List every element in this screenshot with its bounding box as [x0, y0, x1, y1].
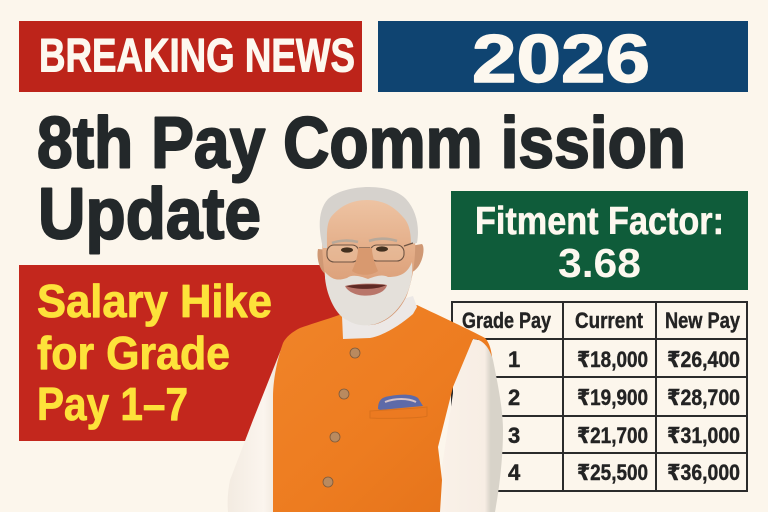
panel: salary hike: Salary Hike	[37, 275, 272, 327]
panel: fitment factor	[451, 191, 748, 290]
panel: fitment factor: Fitment Factor:	[475, 200, 724, 243]
table: grade pay: Current	[575, 308, 644, 333]
table: grade pay: ₹18,000	[577, 347, 648, 372]
table: grade pay: ₹25,500	[577, 460, 648, 485]
table: grade pay: 2	[508, 385, 520, 410]
table: grade pay: ₹19,900	[577, 385, 648, 410]
portrait: man in orange vest	[228, 187, 503, 512]
table: grade pay: ₹28,700	[667, 385, 740, 410]
banner: year 2026	[378, 21, 748, 97]
panel: salary hike: for Grade	[37, 327, 230, 379]
banner: breaking news: BREAKING NEWS	[39, 28, 355, 82]
table: grade pay: 4	[508, 460, 521, 485]
table: grade pay: ₹36,000	[667, 460, 740, 485]
panel: salary hike	[19, 265, 344, 441]
panel: salary hike: Pay 1–7	[37, 378, 188, 430]
panel: fitment factor: 3.68	[558, 240, 641, 286]
table: grade pay: 1	[508, 347, 520, 372]
table: grade pay: 3	[508, 423, 520, 448]
table: grade pay: ₹26,400	[667, 347, 740, 372]
title: 8th Pay Comm ission	[37, 104, 686, 184]
title	[37, 104, 686, 254]
banner: breaking news	[19, 21, 362, 92]
table: grade pay: ₹31,000	[667, 423, 740, 448]
banner: year 2026: 2026	[472, 21, 650, 97]
table: grade pay: ₹21,700	[577, 423, 648, 448]
table: grade pay	[452, 302, 747, 491]
table: grade pay: Grade Pay	[462, 308, 552, 333]
title: Update	[38, 174, 261, 254]
table: grade pay: New Pay	[665, 308, 741, 333]
